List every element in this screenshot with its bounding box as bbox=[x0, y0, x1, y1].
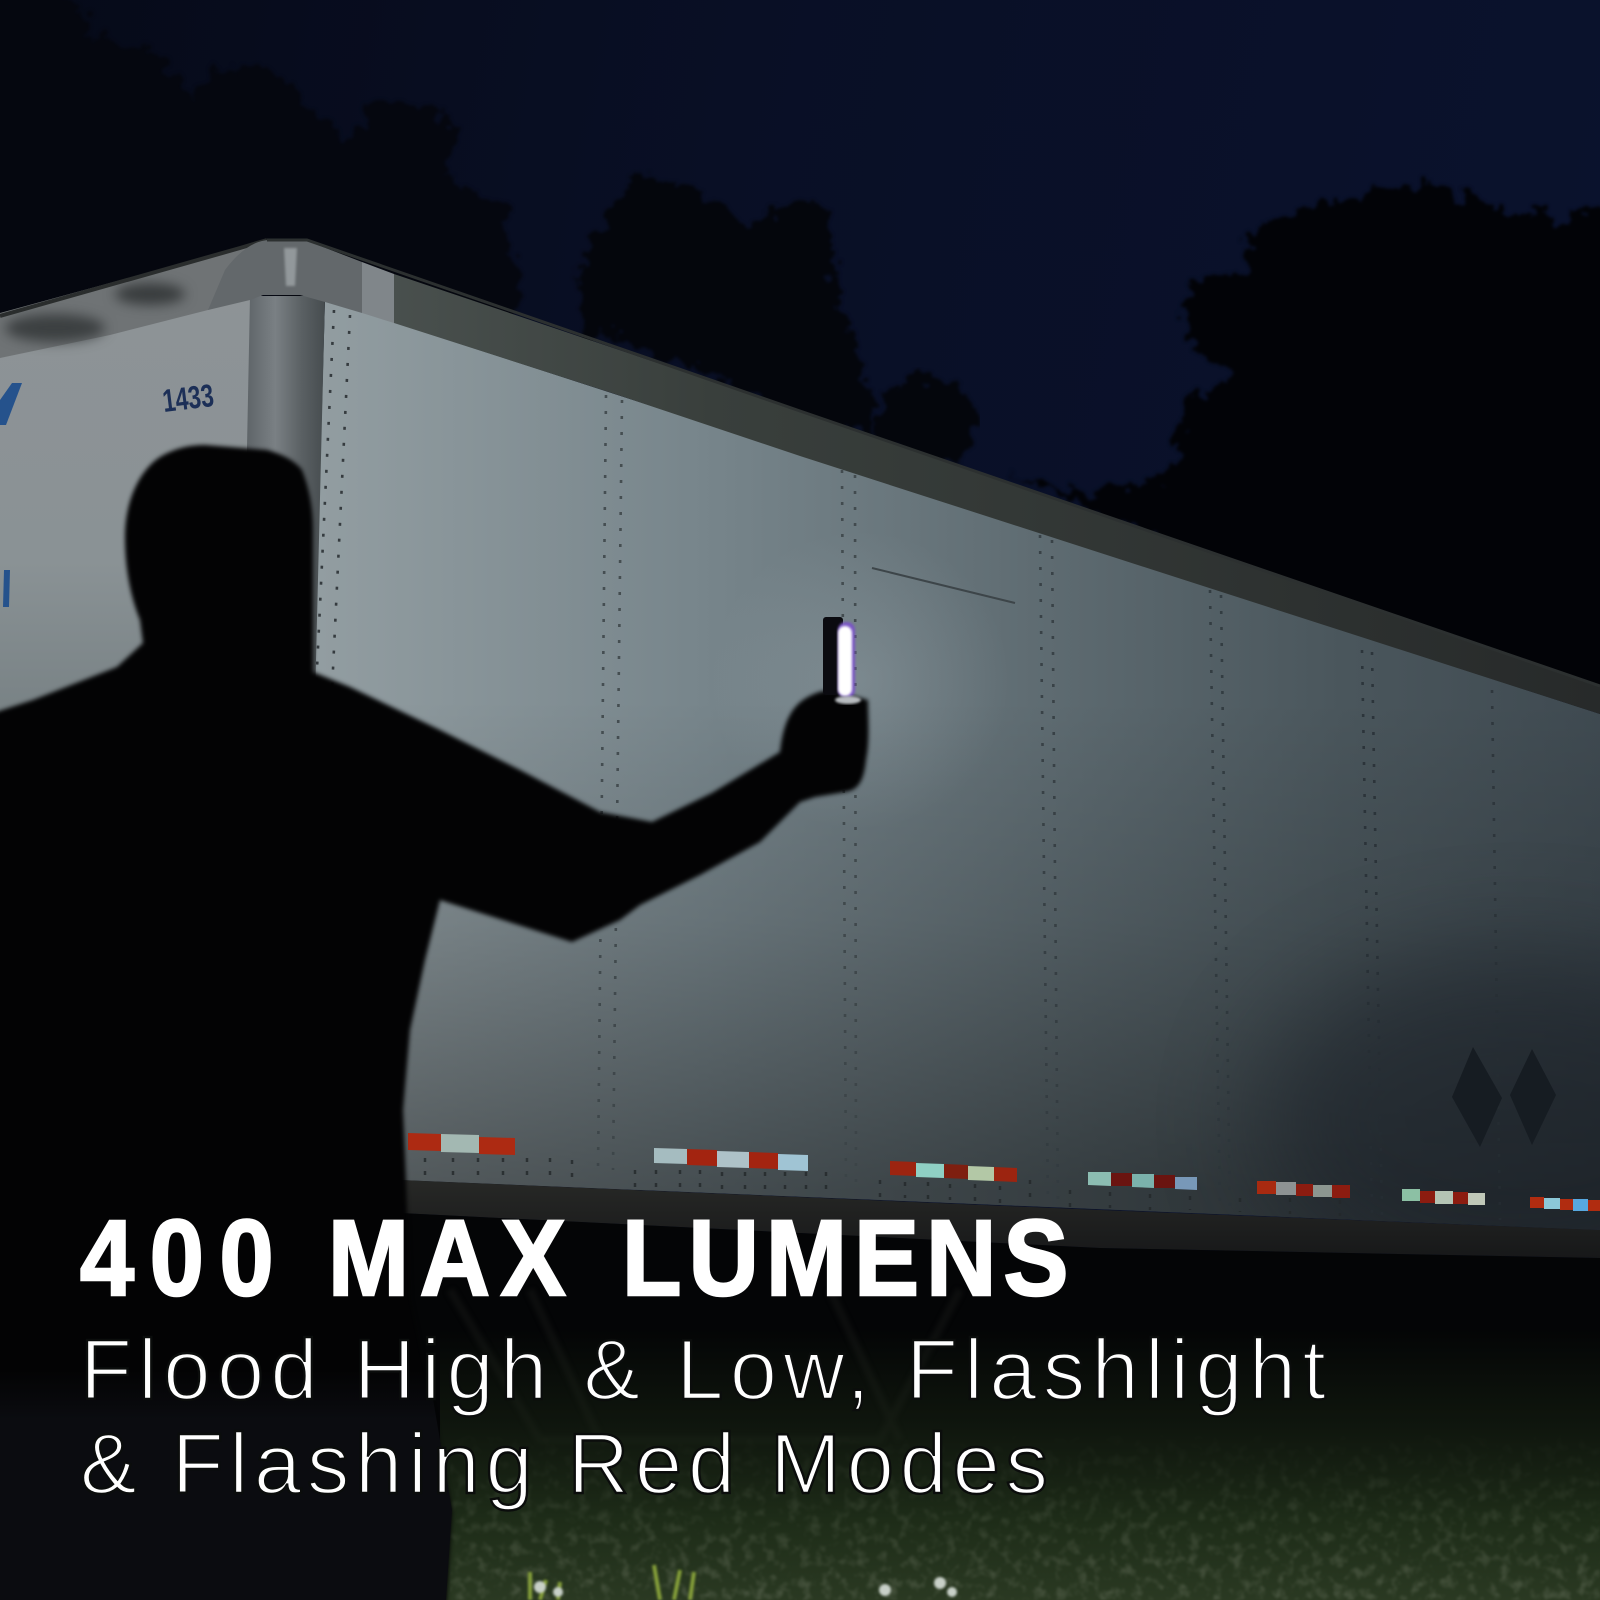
bright foreground plants bbox=[530, 1565, 957, 1600]
tape 2 bbox=[654, 1148, 808, 1171]
tree: small centre right bbox=[875, 372, 975, 470]
post top metal cap bbox=[208, 240, 362, 313]
side roof dark lip bbox=[0, 240, 267, 316]
headline bbox=[80, 1197, 1068, 1318]
top roof rail bbox=[394, 274, 1600, 714]
tape 7 bbox=[1530, 1197, 1600, 1211]
diamond left bbox=[1452, 1047, 1502, 1147]
flashlight glow on panel bbox=[710, 530, 1010, 830]
flashlight held up bbox=[823, 617, 861, 704]
lower body tone bbox=[0, 1370, 452, 1600]
blue logo fragments bbox=[0, 383, 22, 607]
diamond right bbox=[1510, 1049, 1556, 1145]
headline word 400: 400 bbox=[80, 1197, 274, 1318]
right side main panel bbox=[300, 300, 1600, 1230]
speckle texture bbox=[451, 1470, 1600, 1600]
lower side rail bbox=[400, 1180, 1600, 1258]
side roof band bbox=[0, 240, 267, 358]
logo fragment upper bbox=[0, 383, 22, 425]
flashlight body bbox=[823, 617, 843, 695]
grass field bbox=[440, 1330, 1600, 1600]
trailer left side panel bbox=[0, 262, 262, 760]
lens white bbox=[838, 626, 852, 696]
logo fragment lower bbox=[3, 570, 10, 607]
smudge one bbox=[5, 314, 105, 342]
lens outer purple bbox=[838, 622, 855, 698]
hazard diamond stickers bbox=[1452, 1047, 1556, 1147]
trailer undercarriage bbox=[450, 1290, 960, 1440]
unit number: 1433 bbox=[161, 377, 216, 419]
vignette blur bbox=[1276, 948, 1600, 1222]
tree: large right bbox=[1009, 186, 1600, 720]
tape 5 bbox=[1257, 1181, 1350, 1198]
subheading bbox=[80, 1323, 1326, 1512]
reflective tape strips bbox=[408, 1133, 1600, 1211]
tree silhouettes bbox=[0, 0, 1600, 720]
tree: centre bbox=[582, 170, 875, 440]
rivet seams bbox=[316, 310, 1500, 1220]
reflection on fingers bbox=[835, 696, 861, 704]
right bottom vignette bbox=[1276, 948, 1600, 1222]
tree: upper left bbox=[0, 0, 525, 330]
subheading line 2: & Flashing Red Modes bbox=[80, 1417, 1048, 1512]
panel vertical shading bbox=[300, 300, 1600, 1230]
plant left bbox=[530, 1565, 694, 1600]
scratch mark bbox=[872, 568, 1015, 603]
smudge two bbox=[115, 283, 185, 305]
tape 3 bbox=[890, 1161, 1017, 1182]
rivet plate bbox=[362, 262, 394, 323]
headline word LUMENS: LUMENS bbox=[622, 1197, 1068, 1318]
person silhouette bbox=[0, 445, 868, 1600]
trailer bbox=[0, 240, 1600, 1290]
tape 4 bbox=[1088, 1172, 1197, 1190]
seam group lines bbox=[316, 310, 350, 690]
tape 1 bbox=[408, 1133, 515, 1155]
ground under trailer bbox=[0, 1213, 1600, 1600]
gravel speckle on grass bbox=[451, 1470, 1600, 1600]
flowers left bbox=[534, 1577, 957, 1597]
headline word MAX: MAX bbox=[328, 1197, 566, 1318]
tape 6 bbox=[1402, 1189, 1485, 1205]
corner post bbox=[242, 296, 325, 700]
subheading line 1: Flood High & Low, Flashlight bbox=[80, 1323, 1326, 1418]
roof rail highlight lip bbox=[267, 240, 1600, 686]
bottom rivet row bbox=[425, 1158, 1520, 1226]
cap highlight bbox=[284, 248, 297, 286]
grime smudges on side band bbox=[5, 283, 185, 342]
